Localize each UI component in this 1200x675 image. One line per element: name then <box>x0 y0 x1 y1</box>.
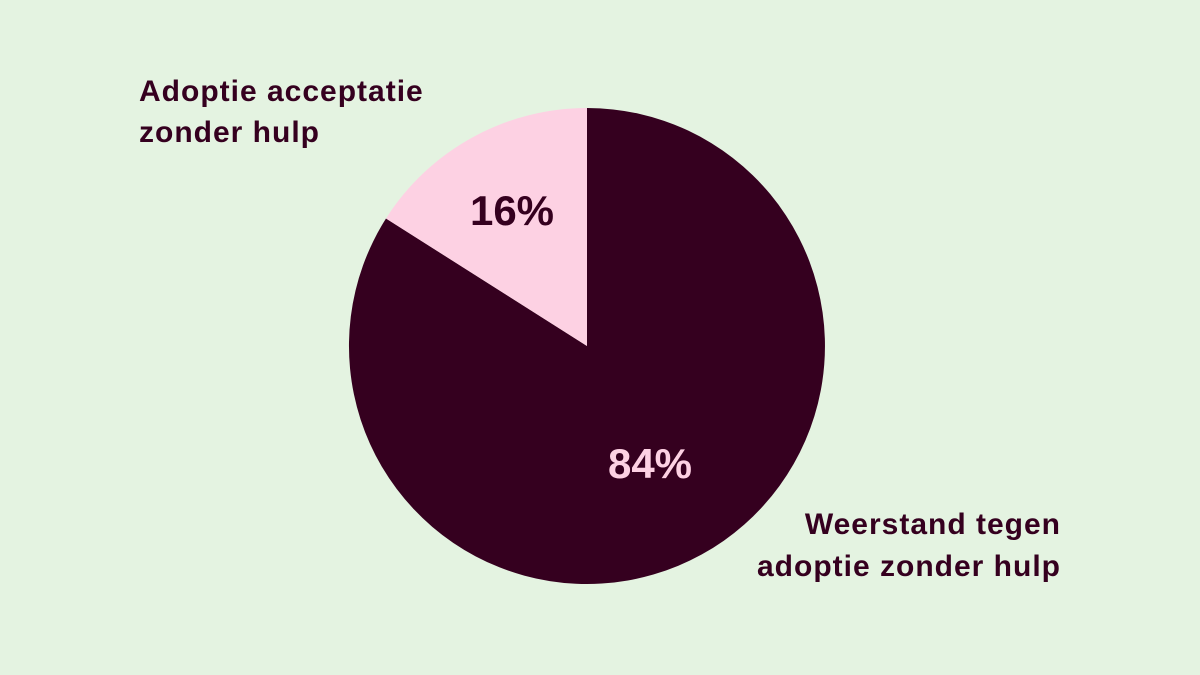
label: acceptance: zonder hulp <box>139 116 320 149</box>
value: 84%: 84% <box>608 440 692 487</box>
label: resistance: Weerstand tegen <box>805 508 1061 541</box>
slice: 84% resistance <box>349 108 825 584</box>
label: resistance: adoptie zonder hulp <box>757 550 1061 583</box>
label: acceptance: Adoptie acceptatie <box>139 75 424 108</box>
label: resistance <box>757 508 1061 583</box>
label: acceptance <box>139 75 424 149</box>
value: 16%: 16% <box>470 187 554 234</box>
slice: 16% acceptance <box>386 108 587 346</box>
